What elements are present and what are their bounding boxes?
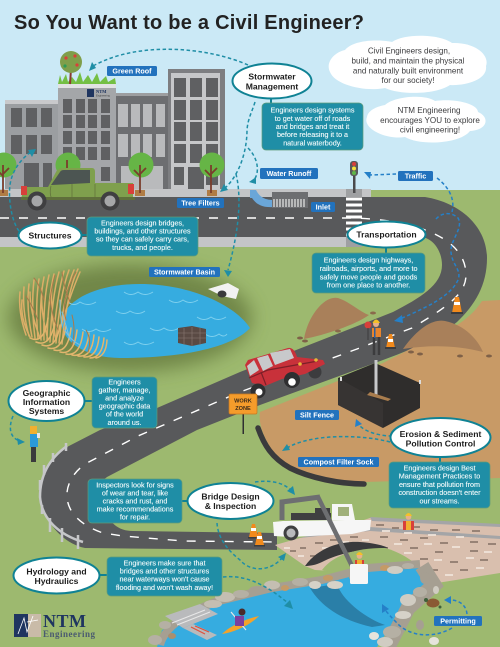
callout: erosion — [390, 418, 490, 457]
panel: transportation: Engineers design highways, — [324, 256, 413, 264]
label: compost filter sock: Compost Filter Sock — [304, 458, 373, 466]
panel: GIS: Engineers — [108, 378, 141, 386]
compost filter sock — [258, 428, 364, 484]
bridge road worker — [403, 513, 414, 530]
panel: transportation: railroads, airports, and more to — [320, 264, 417, 273]
submerged crate — [178, 326, 206, 346]
panel: transportation — [312, 253, 425, 293]
panel: GIS: geographic data — [99, 402, 150, 410]
upper sidewalk — [0, 189, 371, 197]
arrow: permitting to turtle — [444, 596, 467, 614]
callout: structures — [18, 222, 82, 248]
panel: stormwater — [262, 103, 363, 150]
label: traffic: Traffic — [405, 172, 426, 180]
panel: transportation: from one place to another. — [327, 280, 410, 290]
arrow: traffic to light — [364, 172, 396, 179]
panel: bridge inspection: of wear and tear, like — [102, 488, 168, 498]
callout: bridge design — [188, 483, 274, 519]
callout: erosion: Pollution Control — [406, 438, 475, 448]
stormwater basin pond — [62, 284, 250, 358]
flagger worker — [364, 320, 381, 355]
construction dirt area — [260, 300, 500, 482]
logo: NTM Engineering: NTM — [43, 611, 86, 631]
building 4 — [168, 69, 225, 192]
arrow: stormwater to green roof — [89, 49, 248, 71]
callout: GIS: Systems — [29, 406, 64, 416]
logo: NTM Engineering — [14, 611, 96, 639]
basin outlet structure — [208, 283, 239, 299]
label: silt fence: Silt Fence — [300, 410, 334, 420]
green roof with tree — [58, 51, 116, 84]
callout: bridge design: & Inspection — [205, 501, 256, 511]
cones near bridge — [248, 524, 265, 546]
panel: structures: so they can safely carry cars, — [96, 234, 189, 244]
panel: hydrology: near waterways won't cause — [119, 574, 210, 584]
wetland reeds — [20, 269, 107, 358]
panel: bridge inspection: for repair. — [120, 512, 150, 522]
callout: GIS: Information — [23, 397, 70, 407]
label: silt fence — [295, 410, 339, 420]
building 2 — [58, 84, 116, 192]
callout: transportation — [348, 222, 426, 248]
work zone sign — [229, 394, 257, 434]
callout: bridge design: Bridge Design — [201, 492, 260, 502]
panel: erosion: ensure that pollution from — [399, 480, 480, 489]
arrow: hydrology to river — [223, 577, 293, 609]
label: inlet — [311, 202, 335, 212]
soft shadow behind basin — [8, 264, 252, 372]
dirt pile left — [297, 298, 376, 342]
arrow: GIS to surveyor — [10, 416, 25, 445]
connector stems — [82, 99, 440, 575]
traffic light — [350, 161, 358, 193]
panel: erosion: Engineers design Best — [404, 464, 475, 472]
panel: bridge inspection: make recommendations — [97, 504, 174, 514]
panel: erosion: Management Practices to — [399, 472, 480, 480]
cloud: civil engineers definition: Civil Engineers design, — [368, 46, 450, 56]
panel: GIS — [92, 377, 157, 428]
panel: bridge inspection: cracks and rust, and — [103, 496, 167, 506]
dock — [165, 604, 218, 640]
traffic cone upper — [451, 297, 463, 314]
dirt pile right — [403, 321, 492, 358]
cloud: civil engineers definition — [329, 36, 487, 93]
traffic cone near worker — [385, 334, 396, 349]
cloud: civil engineers definition: for our society! — [381, 76, 435, 85]
building 1 — [5, 100, 59, 192]
title: So You Want to be a Civil Engineer? — [14, 12, 364, 34]
bridge wall — [275, 517, 500, 583]
panel: stormwater: to get water off of roads — [275, 114, 351, 123]
building 3 — [116, 93, 170, 192]
label: permitting — [434, 616, 482, 626]
guard rail — [40, 443, 83, 549]
arrow: permitting to river — [382, 604, 452, 635]
cloud: NTM encourages: encourages YOU to explore — [380, 116, 480, 125]
cloud: NTM encourages: NTM Engineering — [398, 106, 460, 115]
callout: hydrology: Hydraulics — [35, 576, 79, 586]
label: tree filters: Tree Filters — [181, 198, 220, 208]
work zone sign: ZONE — [235, 406, 251, 412]
callout: stormwater management: Management — [246, 82, 298, 92]
road centre dashes — [0, 218, 466, 542]
cloud: civil engineers definition: and naturally built environment — [353, 66, 464, 76]
panel: GIS: around us. — [108, 418, 141, 427]
panel: erosion: construction doesn't enter — [398, 488, 481, 497]
bridge shadow on water — [310, 584, 385, 627]
building 2: NTM — [96, 89, 107, 94]
bucket lift arm and worker — [318, 497, 368, 584]
cloud: NTM encourages: civil engineering! — [400, 126, 460, 134]
label: water runoff: Water Runoff — [267, 169, 312, 178]
panel: erosion — [389, 462, 490, 508]
panel: transportation: safely move people and goods — [320, 272, 418, 282]
arrow: stormwater to tree filters and basin — [220, 102, 255, 277]
panel: structures: Engineers design bridges, — [101, 218, 184, 228]
label: green roof: Green Roof — [112, 66, 152, 76]
callout: stormwater management — [232, 64, 312, 98]
cloud: NTM encourages — [366, 97, 486, 143]
panel: hydrology: bridges and other structures — [120, 566, 210, 576]
callout: hydrology — [14, 558, 100, 594]
panel: structures: trucks, and people. — [112, 243, 173, 252]
arrow: bridge to inspection — [217, 523, 286, 569]
callout: transportation: Transportation — [356, 230, 417, 240]
callout: hydrology: Hydrology and — [26, 566, 87, 576]
panel: structures — [87, 217, 198, 256]
arrow: bridge to truck — [255, 481, 295, 495]
label: stormwater basin: Stormwater Basin — [154, 268, 215, 276]
label: water runoff — [260, 168, 318, 179]
cloud: civil engineers definition: build, and maintain the physical — [352, 56, 465, 66]
kayaker — [222, 608, 259, 634]
label: inlet: Inlet — [316, 202, 331, 212]
GIS surveyor — [30, 426, 40, 462]
arrow: structures to building — [9, 149, 36, 231]
panel: stormwater: and bridges and treat it — [276, 122, 349, 131]
callout: GIS — [8, 381, 84, 421]
pickup truck — [21, 168, 135, 210]
panel: hydrology: flooding and won't wash away! — [116, 583, 213, 592]
panel: hydrology — [107, 557, 222, 596]
callout: structures: Structures — [29, 230, 72, 240]
trees and tree filters — [0, 152, 224, 196]
grass ground — [0, 190, 500, 647]
callout: erosion: Erosion & Sediment — [400, 429, 481, 439]
building 2: Engineering — [96, 94, 110, 98]
road — [0, 197, 487, 550]
panel: bridge inspection — [88, 479, 182, 523]
label: traffic — [398, 171, 433, 181]
panel: erosion: our streams. — [420, 496, 459, 506]
sky background — [0, 0, 500, 197]
red SUV — [245, 348, 325, 398]
arrow: stormwater to water runoff — [248, 148, 257, 184]
silt fence — [338, 360, 421, 428]
panel: GIS: and analyze — [105, 394, 144, 402]
logo: NTM Engineering: Engineering — [43, 629, 96, 639]
panel: stormwater: natural waterbody. — [283, 138, 342, 148]
water runoff stream — [250, 190, 274, 207]
callout: stormwater management: Stormwater — [248, 72, 296, 82]
arrow: erosion to silt fence — [355, 419, 392, 436]
callout: GIS: Geographic — [23, 388, 71, 398]
panel: stormwater: before releasing it to a — [277, 130, 348, 139]
buildings — [5, 69, 225, 192]
panel: GIS: gather, manage, — [99, 386, 150, 394]
arrow: traffic to transportation — [394, 178, 460, 323]
river — [157, 568, 435, 647]
crosswalk — [346, 189, 362, 247]
white work truck — [273, 497, 371, 540]
river rocks — [148, 563, 439, 647]
arrow: erosion to compost sock — [282, 437, 390, 451]
panel: hydrology: Engineers make sure that — [124, 558, 205, 568]
turtle — [424, 598, 442, 608]
panel: bridge inspection: Inspectors look for signs — [96, 480, 174, 490]
panel: structures: buildings, and other structures — [94, 226, 191, 236]
panel: stormwater: Engineers design systems — [271, 106, 355, 114]
lower sidewalk — [0, 237, 347, 247]
label: permitting: Permitting — [440, 616, 476, 626]
work zone sign: WORK — [234, 398, 252, 404]
panel: GIS: of the world — [106, 410, 143, 418]
inlet grate — [272, 192, 308, 208]
